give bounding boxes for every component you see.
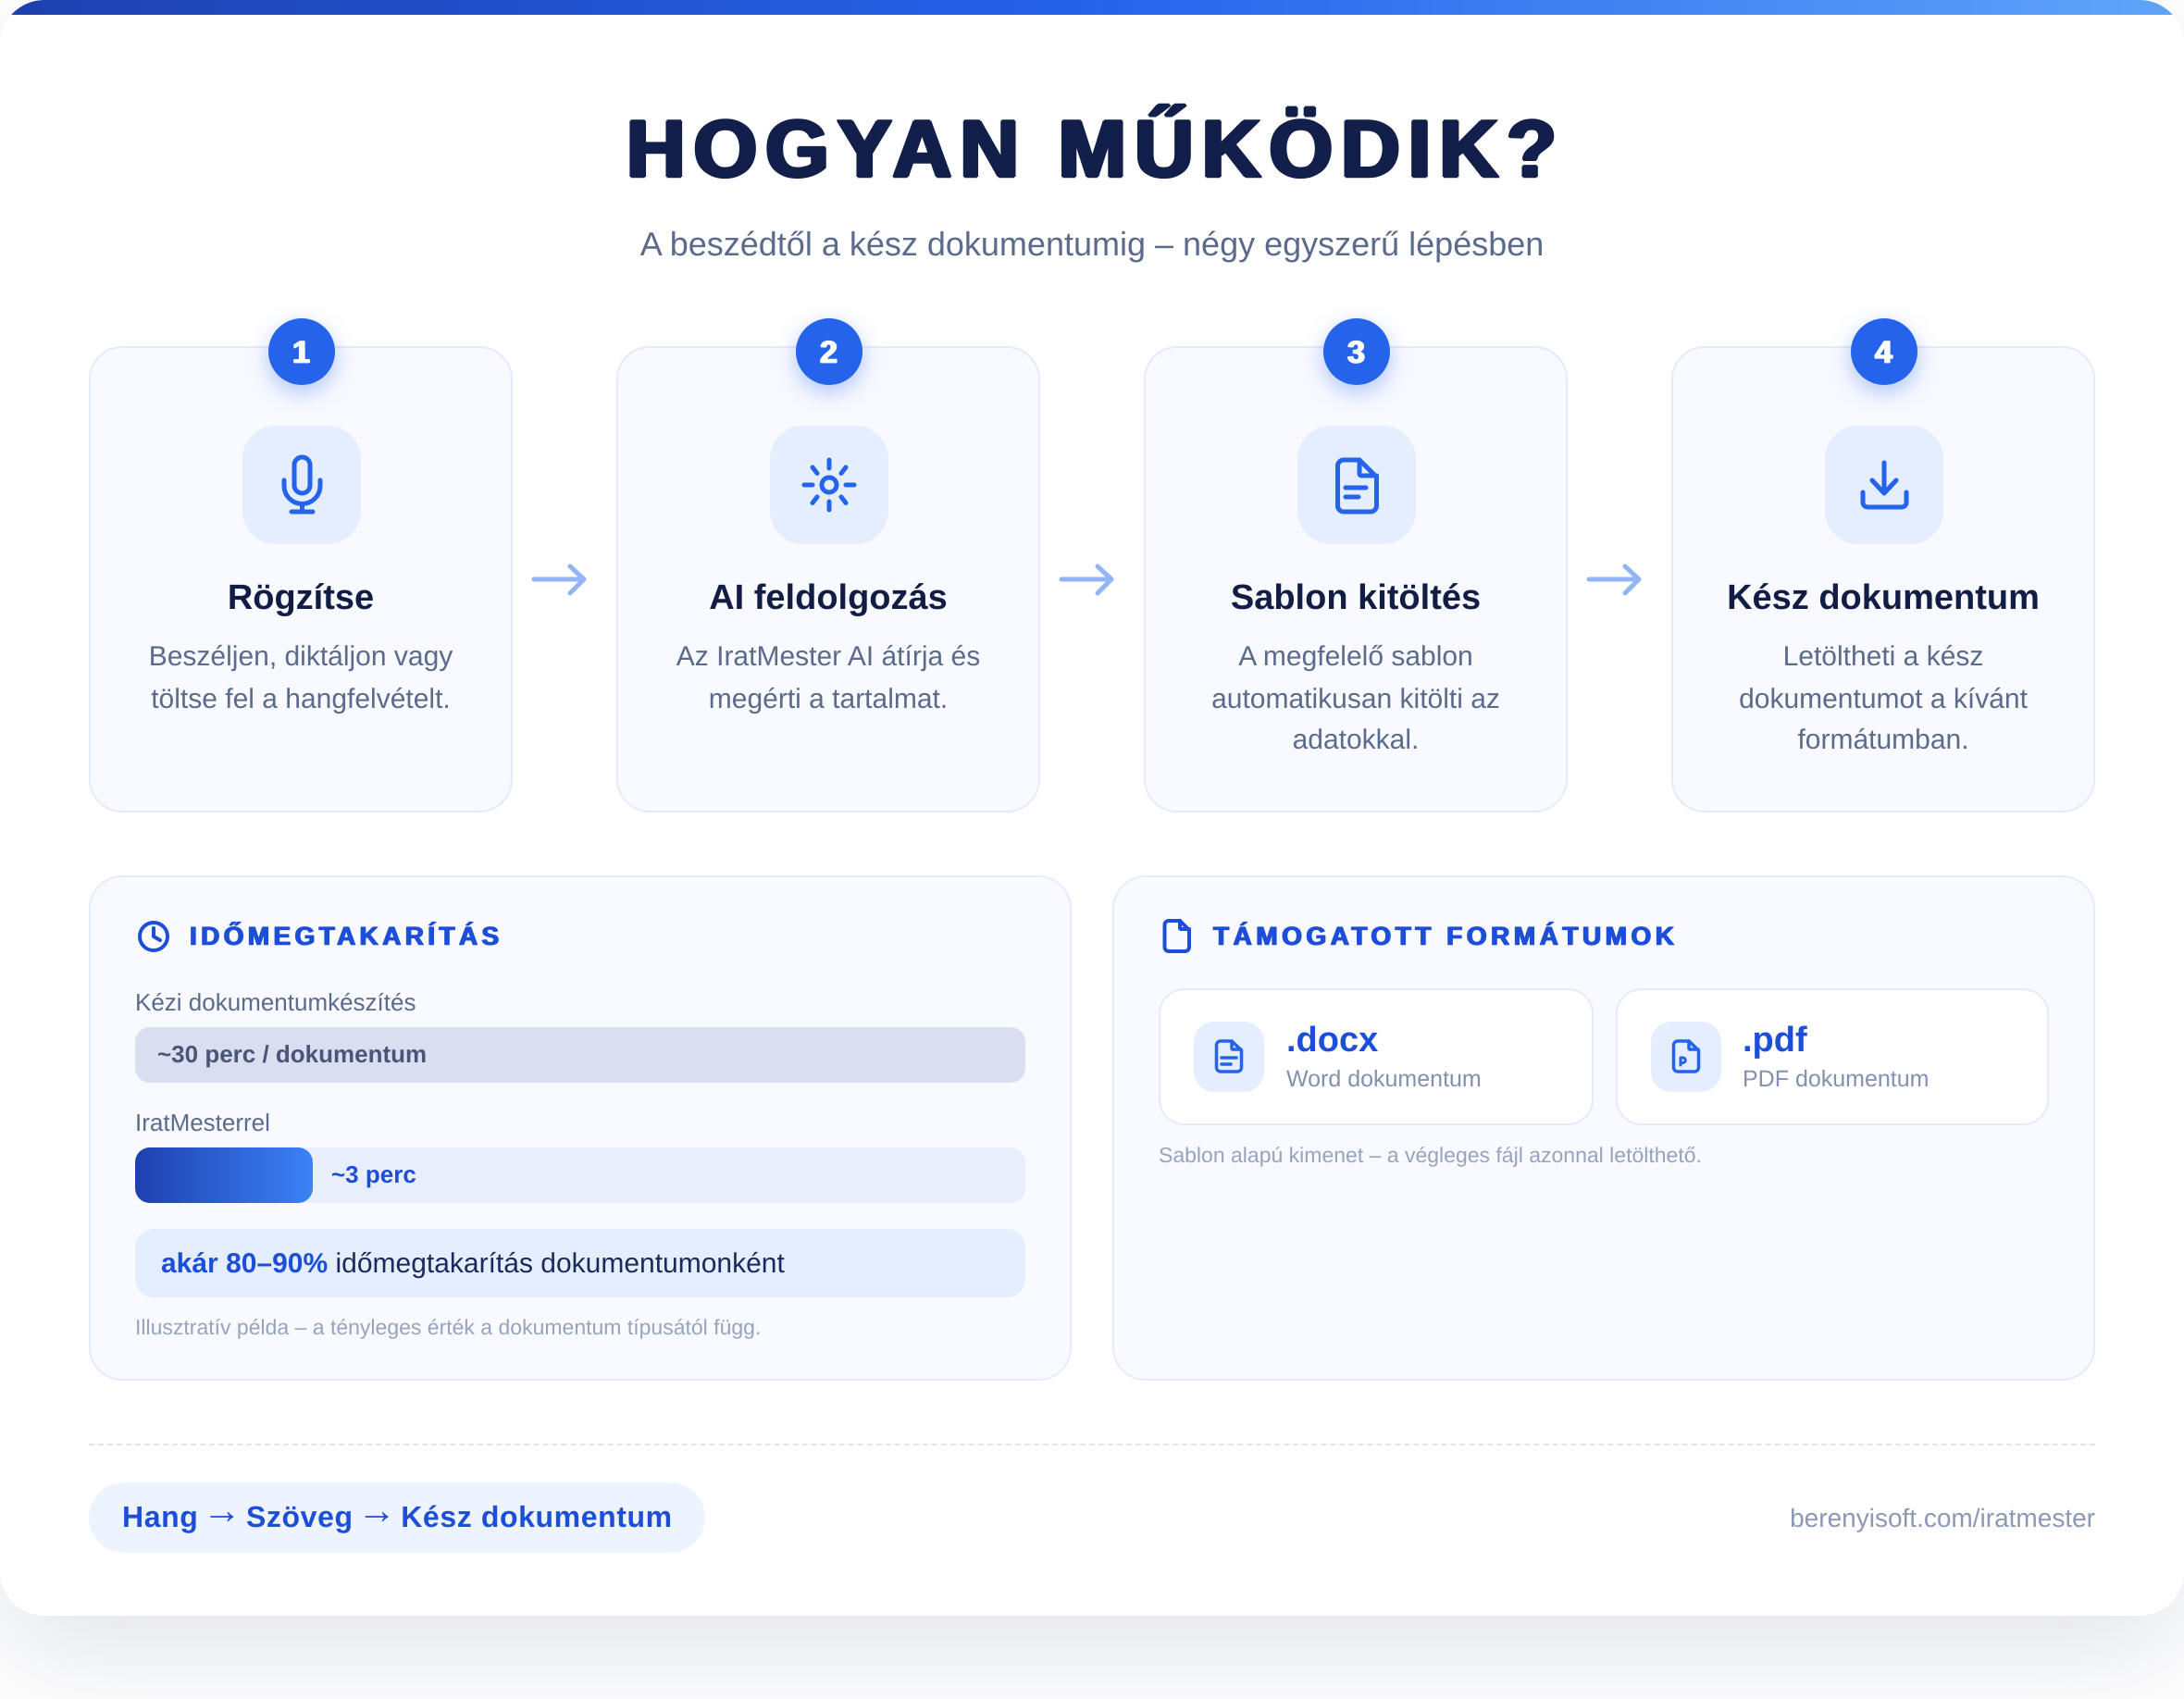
docx icon tile [1194, 1022, 1264, 1092]
step 2 description: Az IratMester AI átírja és [676, 641, 980, 672]
bar: IratMester 3 minutes [135, 1147, 1025, 1203]
icon: clock [140, 923, 168, 950]
step 2 number badge [796, 318, 862, 385]
arrow: step 3 to 4 [1589, 566, 1639, 593]
format card: docx [1159, 988, 1594, 1125]
step 4 number badge [1851, 318, 1917, 385]
label: manual: Kézi dokumentumkészítés [135, 988, 416, 1016]
icon: download [1863, 463, 1906, 507]
step 1 number badge: 1 [292, 335, 310, 370]
step 4 description: Letöltheti a kész [1783, 641, 1983, 672]
footer pill [89, 1482, 705, 1553]
docx name: .docx [1286, 1021, 1378, 1060]
step 2 icon tile [770, 426, 888, 544]
top gradient bar [0, 0, 2184, 15]
step 2 heading: AI feldolgozás [709, 578, 948, 617]
callout: saving: akár 80–90% időmegtakarítás dokumentumonként [161, 1248, 785, 1279]
step 1 icon tile [242, 426, 361, 544]
pdf name: .pdf [1743, 1021, 1807, 1060]
step 3 description: adatokkal. [1293, 725, 1419, 755]
panel heading: formats: TÁMOGATOTT FORMÁTUMOK [1213, 922, 1679, 950]
step 3 icon tile [1297, 426, 1416, 544]
step 1 description: töltse fel a hangfelvételt. [151, 684, 451, 714]
panel: supported formats [1112, 875, 2095, 1381]
step 4 number badge: 4 [1875, 335, 1892, 370]
step 4 heading: Kész dokumentum [1727, 578, 2040, 617]
step 4 description: dokumentumot a kívánt [1739, 684, 2028, 714]
label: with IratMester: IratMesterrel [135, 1109, 270, 1136]
subtitle: A beszédtől a kész dokumentumig – négy egyszerű lépésben [640, 225, 1544, 263]
icon: microphone [284, 457, 320, 512]
step 3 description: A megfelelő sablon [1238, 641, 1473, 672]
format card: pdf [1616, 988, 2049, 1125]
step 1 description: Beszéljen, diktáljon vagy [149, 641, 453, 672]
step 3 number badge: 3 [1347, 335, 1365, 370]
bar: IratMester 3 minutes: ~3 perc [331, 1160, 416, 1188]
footer pill: Hang → Szöveg → Kész dokumentum [122, 1488, 673, 1533]
arrow: step 2 to 3 [1061, 566, 1111, 593]
step 1 description [149, 641, 453, 714]
icon: document [1338, 460, 1377, 512]
bar: manual 30 minutes: ~30 perc / dokumentum [157, 1040, 427, 1068]
step 1 number badge [268, 318, 335, 385]
icon: file outline [1164, 921, 1189, 951]
arrow: step 1 to 2 [534, 566, 584, 593]
icon: processing gear [804, 460, 854, 510]
panel: step 2 card [616, 346, 1040, 812]
note: template output: Sablon alapú kimenet – a végleges fájl azonnal letölthető. [1159, 1143, 1702, 1167]
panel: step 4 card [1671, 346, 2095, 812]
step 4 description [1739, 641, 2028, 755]
step 2 description [676, 641, 980, 714]
step 4 icon tile [1825, 426, 1943, 544]
pdf icon tile [1651, 1022, 1721, 1092]
step 4 description: formátumban. [1797, 725, 1969, 755]
step 3 heading: Sablon kitöltés [1231, 578, 1481, 617]
panel: step 3 card [1144, 346, 1568, 812]
icon: pdf file [1673, 1041, 1699, 1072]
step 3 description [1211, 641, 1500, 755]
step 3 description: automatikusan kitölti az [1211, 684, 1500, 714]
docx description: Word dokumentum [1286, 1066, 1482, 1092]
callout: saving [135, 1229, 1025, 1297]
footer url: berenyisoft.com/iratmester [1790, 1504, 2095, 1532]
step 3 number badge [1323, 318, 1390, 385]
step 2 description: megérti a tartalmat. [709, 684, 948, 714]
icon: docx file [1216, 1041, 1242, 1072]
panel heading: time saving: IDŐMEGTAKARÍTÁS [190, 922, 503, 950]
step 1 heading: Rögzítse [228, 578, 374, 617]
panel: time saving [89, 875, 1072, 1381]
bar: manual 30 minutes [135, 1027, 1025, 1083]
pdf description: PDF dokumentum [1743, 1066, 1929, 1092]
panel: step 1 card [89, 346, 513, 812]
step 2 number badge: 2 [820, 335, 838, 370]
title: HOGYAN MŰKÖDIK? [627, 103, 1565, 194]
note: illustrative: Illusztratív példa – a tényleges érték a dokumentum típusától függ. [135, 1315, 761, 1339]
